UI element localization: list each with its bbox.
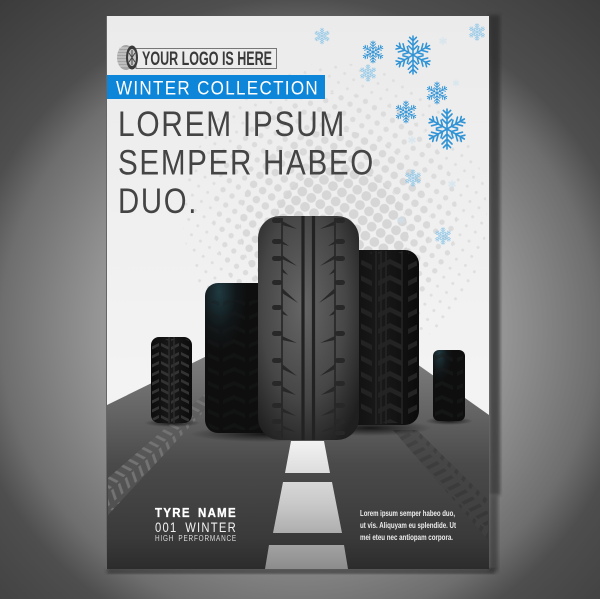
- title: LOREM IPSUM: [118, 104, 346, 144]
- left tyre track: [108, 392, 207, 515]
- description text: [360, 508, 456, 542]
- road: [107, 352, 489, 569]
- logo: [117, 45, 276, 70]
- tyre name block: HIGH PERFORMANCE: [155, 534, 237, 543]
- tyre: large center: [258, 216, 359, 440]
- logo box: [136, 48, 276, 68]
- description text: ut vis. Aliquyam eu splendide. Ut: [360, 520, 456, 530]
- snowflakes: [314, 24, 485, 244]
- tyre: large right: [340, 250, 419, 425]
- description text: mei eteu nec antiopam corpora.: [360, 532, 453, 542]
- description text: Lorem ipsum semper habeo duo,: [360, 508, 455, 518]
- tread lugs right: [319, 218, 345, 438]
- poster shadow: [106, 15, 500, 574]
- tyre shadows: [144, 417, 473, 442]
- tyre: small right: [433, 350, 465, 421]
- title: SEMPER HABEO: [118, 142, 375, 182]
- halftone dot background: [184, 64, 487, 334]
- logo text: YOUR LOGO IS HERE: [142, 48, 272, 70]
- poster page: [107, 16, 489, 569]
- center grooves: [303, 216, 314, 440]
- title: DUO.: [118, 181, 198, 221]
- icon: tyre: [117, 45, 138, 70]
- tyre: large left: [205, 283, 275, 433]
- road dashes: [265, 441, 348, 569]
- tyre name block: 001 WINTER: [155, 520, 237, 535]
- tyre: small left: [151, 337, 192, 423]
- tyre name block: [155, 505, 237, 543]
- tyre name block: TYRE NAME: [155, 505, 237, 520]
- tread lugs left: [272, 218, 298, 438]
- right tyre track: [393, 430, 488, 540]
- banner: winter collection: WINTER COLLECTION: [116, 78, 319, 100]
- title: [118, 104, 375, 221]
